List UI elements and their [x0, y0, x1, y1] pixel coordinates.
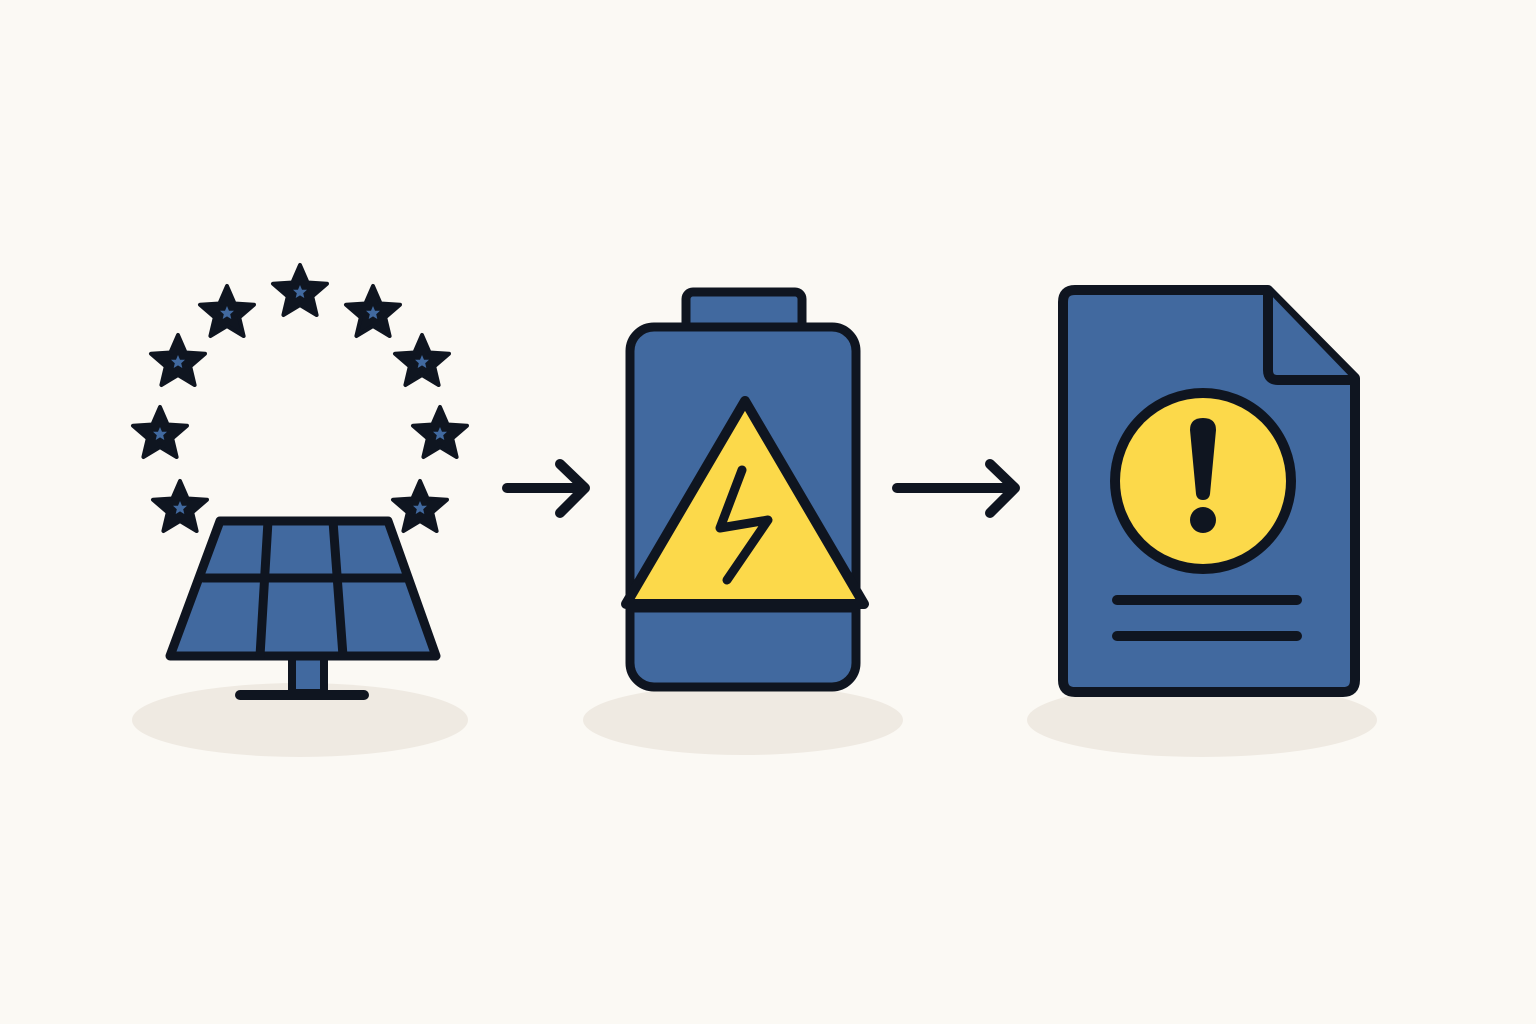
icon: lightning bolt [720, 470, 768, 580]
panel: document alert [1027, 290, 1377, 757]
arrow 2 [897, 464, 1015, 513]
icon: exclamation mark [1190, 418, 1216, 533]
panel: battery warning [583, 292, 903, 755]
icon: battery [626, 292, 864, 687]
panel: solar panel with EU stars [132, 265, 468, 757]
icon: solar panel [170, 521, 436, 695]
icon: exclamation badge [1115, 393, 1291, 569]
arrow 1 [507, 464, 585, 513]
icon: document [1063, 290, 1355, 692]
icon: ring of stars [133, 265, 467, 531]
icon: warning triangle [626, 401, 864, 604]
